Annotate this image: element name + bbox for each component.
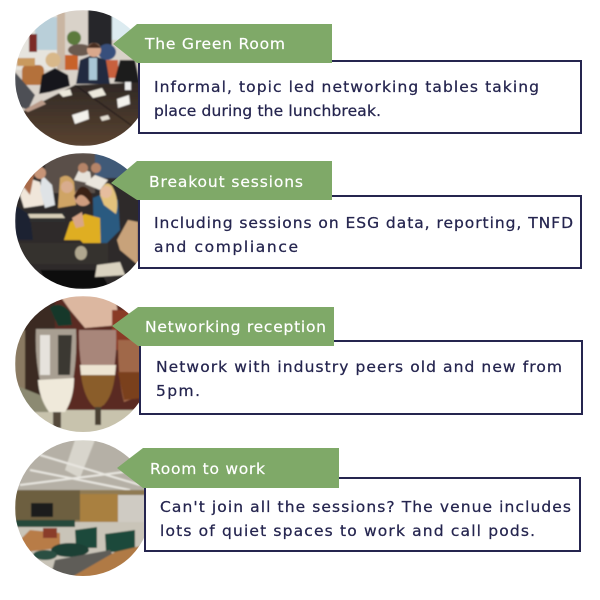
tag: heading — [117, 448, 339, 488]
photo: networking table — [15, 10, 151, 146]
panel: The Green Room — [15, 10, 581, 146]
text: description: Network with industry peers old and new from — [156, 358, 562, 376]
tag: heading: The Green Room — [144, 35, 285, 53]
tag: heading: Room to work — [150, 460, 265, 478]
panel box: description — [145, 478, 580, 551]
tag: heading — [113, 24, 332, 63]
panel box: description — [140, 341, 582, 414]
panel: Networking reception — [15, 296, 582, 435]
panel: Room to work — [15, 440, 580, 578]
text: description: 5pm. — [156, 382, 200, 400]
middle glass — [78, 329, 118, 366]
text: description: Can't join all the sessions? The venue includes — [160, 498, 571, 516]
photo: audience clapping — [15, 153, 151, 289]
left glass — [34, 328, 78, 380]
text: description: Including sessions on ESG data, reporting, TNFD — [154, 214, 573, 232]
text: description: place during the lunchbreak. — [154, 102, 381, 120]
tag: heading — [111, 161, 332, 200]
right glass — [118, 340, 142, 402]
tag: heading: Breakout sessions — [149, 173, 303, 191]
panel box: description — [139, 61, 581, 133]
text: description: Informal, topic led networking tables taking — [154, 78, 539, 96]
text: description: lots of quiet spaces to work and call pods. — [160, 522, 535, 540]
text: description: and compliance — [154, 238, 298, 256]
photo: venue lounge — [15, 440, 151, 578]
panel box: description — [139, 196, 581, 268]
panel: Breakout sessions — [15, 153, 581, 289]
photo: champagne glasses — [15, 296, 139, 432]
tag: heading: Networking reception — [145, 318, 326, 336]
tag: heading — [112, 307, 334, 346]
